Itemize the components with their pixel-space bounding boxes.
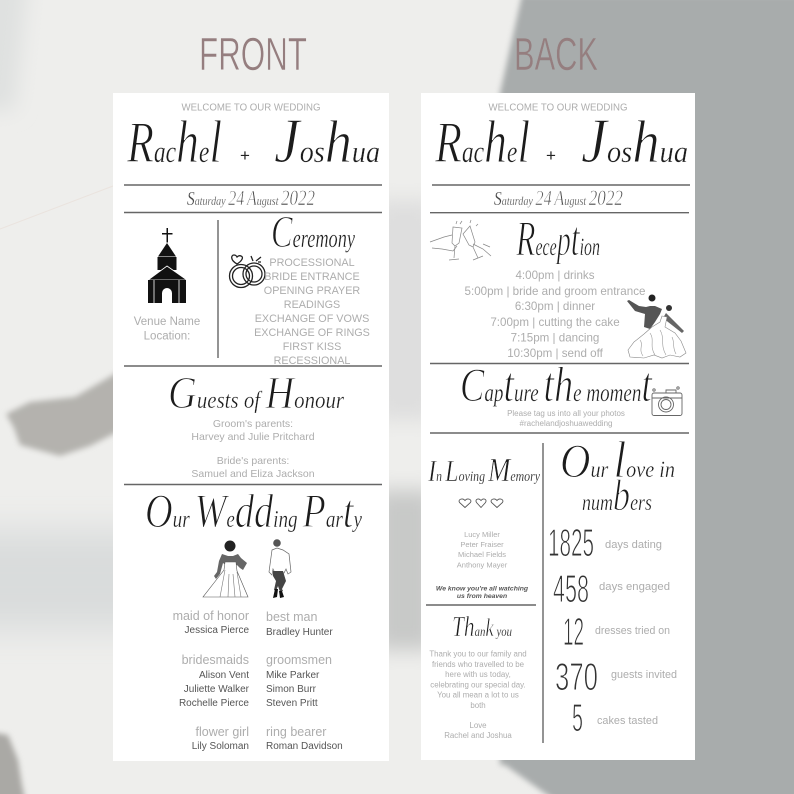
wedding party names: right column: Mike Parker bbox=[266, 670, 320, 681]
reception schedule: 5:00pm | bride and groom entrance bbox=[465, 285, 645, 298]
guests of honour names: Samuel and Eliza Jackson bbox=[191, 468, 315, 480]
wedding party names: left column: Rochelle Pierce bbox=[179, 698, 249, 709]
memorial caption bbox=[436, 586, 529, 600]
stat: days engaged bbox=[553, 568, 670, 611]
social caption bbox=[507, 409, 625, 428]
heading: ceremony: Ceremony bbox=[271, 206, 355, 257]
wedding party names: left column: bridesmaids bbox=[182, 653, 249, 667]
heading: FRONT: FRONT bbox=[199, 28, 307, 80]
stat: guests invited: guests invited bbox=[611, 669, 677, 681]
heading: our love in numbers: Our love in bbox=[560, 432, 675, 489]
heading: capture the moment: Capture the moment bbox=[460, 356, 653, 412]
memorial caption: We know you're all watching bbox=[436, 586, 529, 592]
ceremony order list: PROCESSIONAL bbox=[269, 257, 355, 269]
wedding party names: left column: Lily Soloman bbox=[192, 741, 249, 752]
couple names: Rachel bbox=[434, 109, 530, 175]
thank you message: Rachel and Joshua bbox=[444, 731, 512, 740]
thank you message: here with us today, bbox=[445, 670, 511, 679]
wedding party names: left column: flower girl bbox=[196, 725, 249, 739]
stat: dresses tried on bbox=[563, 611, 670, 654]
stat: dresses tried on: 12 bbox=[563, 611, 584, 654]
stat: cakes tasted: 5 bbox=[572, 697, 583, 740]
heading: thank you: Thank you bbox=[452, 612, 512, 643]
couple names: + bbox=[240, 146, 250, 165]
wedding party names: right column: groomsmen bbox=[266, 653, 332, 667]
wedding party names: right column: ring bearer bbox=[266, 725, 326, 739]
couple names: + bbox=[546, 146, 556, 165]
thank you message bbox=[429, 650, 527, 740]
illustration: groom bbox=[269, 539, 291, 598]
wedding party names: right column: Steven Pritt bbox=[266, 698, 318, 709]
panel: front card bbox=[113, 93, 389, 761]
guests of honour names bbox=[191, 418, 315, 480]
wedding party names: left column: maid of honor bbox=[173, 609, 249, 623]
couple names: Rachel bbox=[126, 109, 222, 175]
couple names bbox=[126, 105, 380, 176]
thank you message: celebrating our special day. bbox=[430, 680, 526, 690]
reception schedule: 7:15pm | dancing bbox=[511, 332, 599, 344]
memorial names bbox=[457, 530, 508, 570]
icon: camera bbox=[652, 387, 682, 416]
wedding party names: right column bbox=[266, 610, 343, 752]
memorial names: Michael Fields bbox=[458, 550, 506, 559]
couple names: Joshua bbox=[581, 105, 688, 176]
couple names bbox=[434, 105, 688, 176]
stat: cakes tasted: cakes tasted bbox=[597, 715, 658, 727]
stat: guests invited bbox=[555, 656, 677, 699]
wedding party names: left column: Juliette Walker bbox=[184, 684, 250, 695]
wedding party names: right column: Roman Davidson bbox=[266, 741, 343, 752]
heading: our love in numbers bbox=[560, 432, 675, 520]
stat: dresses tried on: dresses tried on bbox=[595, 625, 670, 637]
reception schedule: 4:00pm | drinks bbox=[515, 269, 595, 282]
heading: our wedding party: Our Wedding Party bbox=[145, 485, 362, 538]
heading: in loving memory: In Loving Memory bbox=[427, 452, 540, 489]
wedding party names: right column: Simon Burr bbox=[266, 684, 317, 695]
ceremony order list bbox=[254, 257, 370, 367]
reception schedule: 7:00pm | cutting the cake bbox=[490, 316, 620, 329]
social caption: #rachelandjoshuawedding bbox=[520, 419, 612, 428]
wedding party names: right column: best man bbox=[266, 610, 317, 624]
wedding party names: left column: Jessica Pierce bbox=[185, 625, 249, 636]
heading: guests of honour: Guests of Honour bbox=[168, 367, 345, 418]
icon: hearts bbox=[459, 499, 503, 508]
thank you message: You all mean a lot to us bbox=[437, 690, 519, 700]
reception schedule bbox=[465, 269, 645, 360]
venue: Venue Name bbox=[134, 316, 200, 328]
stat: days engaged: 458 bbox=[553, 568, 589, 611]
guests of honour names: Bride's parents: bbox=[217, 455, 289, 467]
guests of honour names: Harvey and Julie Pritchard bbox=[191, 431, 315, 443]
ceremony order list: EXCHANGE OF VOWS bbox=[255, 313, 369, 325]
reception schedule: 10:30pm | send off bbox=[507, 347, 604, 360]
ceremony order list: OPENING PRAYER bbox=[264, 285, 360, 297]
guests of honour names: Groom's parents: bbox=[213, 418, 293, 430]
stat: days engaged: days engaged bbox=[599, 581, 670, 593]
illustration: dancing couple bbox=[627, 294, 686, 358]
ceremony order list: EXCHANGE OF RINGS bbox=[254, 327, 370, 339]
wedding party names: left column bbox=[173, 609, 250, 752]
thank you message: friends who travelled to be bbox=[432, 660, 525, 669]
venue: Location: bbox=[144, 330, 190, 342]
memorial names: Anthony Mayer bbox=[457, 560, 508, 570]
memorial caption: us from heaven bbox=[457, 593, 507, 600]
statistics list bbox=[548, 522, 677, 740]
thank you message: Thank you to our family and bbox=[429, 650, 527, 658]
stat: days dating: days dating bbox=[605, 539, 662, 551]
ceremony order list: BRIDE ENTRANCE bbox=[264, 271, 360, 283]
venue bbox=[134, 316, 200, 342]
couple names: Joshua bbox=[274, 105, 380, 176]
heading: our love in numbers: numbers bbox=[582, 471, 652, 520]
reception schedule: 6:30pm | dinner bbox=[515, 300, 595, 313]
stat: cakes tasted bbox=[572, 697, 658, 740]
panel: back card bbox=[421, 93, 695, 760]
thank you message: Love bbox=[469, 721, 487, 730]
thank you message: both bbox=[470, 701, 486, 710]
wedding party names: right column: Bradley Hunter bbox=[266, 627, 333, 638]
social caption: Please tag us into all your photos bbox=[507, 409, 625, 418]
date: Saturday 24 August 2022 bbox=[187, 185, 315, 210]
heading: reception: Reception bbox=[515, 210, 600, 266]
wedding party names: left column: Alison Vent bbox=[199, 670, 249, 681]
stat: guests invited: 370 bbox=[555, 656, 598, 699]
stat: days dating: 1825 bbox=[548, 522, 594, 565]
welcome line: WELCOME TO OUR WEDDING bbox=[488, 102, 628, 114]
icon: champagne toast bbox=[430, 220, 491, 260]
ceremony order list: RECESSIONAL bbox=[274, 355, 350, 367]
memorial names: Lucy Miller bbox=[464, 530, 500, 539]
memorial names: Peter Fraiser bbox=[460, 540, 504, 549]
heading: BACK: BACK bbox=[514, 28, 598, 80]
ceremony order list: READINGS bbox=[284, 299, 340, 311]
illustration: bride bbox=[203, 540, 248, 597]
ceremony order list: FIRST KISS bbox=[283, 341, 341, 353]
date: Saturday 24 August 2022 bbox=[494, 185, 623, 210]
icon: wedding rings bbox=[230, 255, 265, 288]
icon: church bbox=[148, 228, 187, 303]
welcome line: WELCOME TO OUR WEDDING bbox=[182, 102, 320, 114]
